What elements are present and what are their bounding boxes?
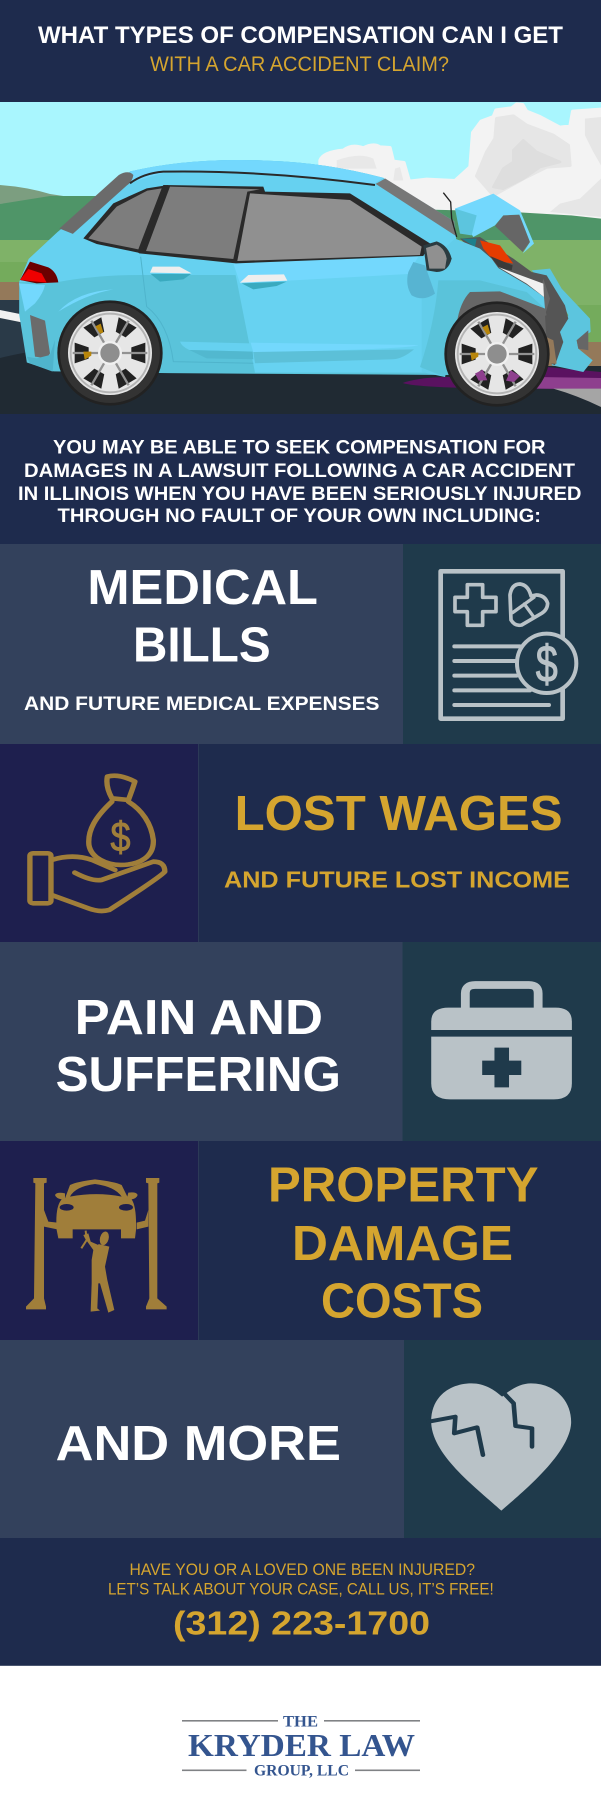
illustration: crashed blue car [0,102,601,414]
smoke clouds [320,104,601,217]
icon: first aid kit [431,985,572,1099]
panel: lost wages [0,744,601,942]
panel: and more [0,1340,601,1538]
icon: car on lift with mechanic [26,1178,167,1313]
front wheel [444,301,550,407]
panel: pain and suffering [0,942,601,1141]
wiper [443,193,457,237]
hood [495,215,530,252]
call to action text: LET’S TALK ABOUT YOUR CASE, CALL US, IT’S FREE! [108,1580,494,1598]
intro text: DAMAGES IN A LAWSUIT FOLLOWING A CAR ACCIDENT [24,460,575,482]
call to action text: HAVE YOU OR A LOVED ONE BEEN INJURED? [130,1561,475,1579]
intro text: YOU MAY BE ABLE TO SEEK COMPENSATION FOR [53,436,546,458]
icon: hand holding money bag: $ [110,813,130,860]
car rear details [19,185,168,372]
title: WHAT TYPES OF COMPENSATION CAN I GET [38,22,563,49]
logo: GROUP, LLC [254,1763,349,1780]
intro panel [0,414,601,544]
call to action text [108,1561,494,1598]
car body [19,160,548,375]
heading: property damage costs: COSTS [321,1275,483,1329]
intro text [18,436,582,527]
heading: medical bills [87,561,318,673]
door skirt [251,343,418,352]
heading: property damage costs: DAMAGE [292,1217,513,1271]
mirror shadow [407,262,435,298]
panel: medical bills [0,544,601,744]
intro text: THROUGH NO FAULT OF YOUR OWN INCLUDING: [58,505,541,527]
logo: KRYDER LAW [188,1727,415,1763]
mirror [423,241,452,272]
front door [236,275,423,372]
icon: broken heart [429,1383,571,1511]
car front damage [380,193,593,377]
car doors and windows [130,171,430,373]
middle window [146,187,260,259]
heading: property damage costs [268,1159,538,1329]
heading: medical bills: BILLS [133,619,271,673]
heading: medical bills: MEDICAL [87,561,318,615]
window frames [138,185,430,263]
intro text: IN ILLINOIS WHEN YOU HAVE BEEN SERIOUSLY INJURED [18,483,582,505]
heading: and more: AND MORE [56,1417,341,1471]
rear wheel [57,300,163,406]
subheading: AND FUTURE MEDICAL EXPENSES [24,693,380,715]
wheel hole overlays [475,370,520,382]
header panel [0,0,601,102]
icon: medical bill document: $ [536,636,558,694]
heading: property damage costs: PROPERTY [268,1159,538,1213]
heading: pain and suffering [56,991,341,1102]
landscape background [0,102,601,368]
heading: pain and suffering: PAIN AND [75,991,323,1045]
panel: property damage costs [0,1141,601,1340]
front window [237,193,422,261]
road and puddle [0,352,601,414]
heading: pain and suffering: SUFFERING [56,1048,341,1102]
icon: medical bill document [441,571,576,719]
logo: THE [283,1714,318,1731]
icon: hand holding money bag [30,776,165,911]
footer call to action [0,1538,601,1666]
logo [182,1714,420,1780]
subheading: AND FUTURE LOST INCOME [224,867,570,893]
roof line [130,171,375,185]
phone number: (312) 223-1700 [173,1605,430,1642]
heading: lost wages: LOST WAGES [235,787,563,841]
subtitle: WITH A CAR ACCIDENT CLAIM? [150,53,449,76]
door handles [150,267,192,273]
